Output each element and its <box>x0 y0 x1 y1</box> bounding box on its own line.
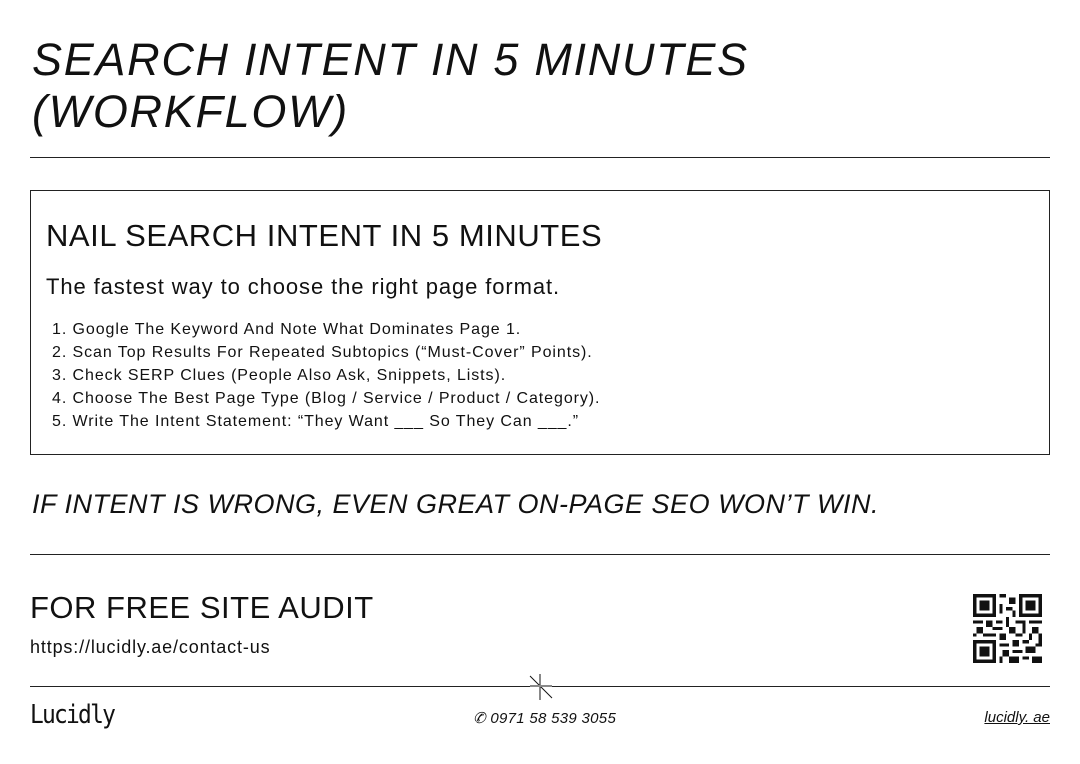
icon: QR code <box>973 594 1042 663</box>
box heading: NAIL SEARCH INTENT IN 5 MINUTES <box>46 218 602 253</box>
steps list <box>52 321 600 430</box>
title: (WORKFLOW) <box>32 86 349 137</box>
panel: workflow box <box>30 190 1050 455</box>
steps list: 5. Write The Intent Statement: “They Want ___ So They Can ___.” <box>52 413 579 430</box>
steps list: 3. Check SERP Clues (People Also Ask, Snippets, Lists). <box>52 367 506 384</box>
phone: ✆ 0971 58 539 3055 <box>473 710 616 727</box>
callout quote: IF INTENT IS WRONG, EVEN GREAT ON-PAGE SEO WON’T WIN. <box>32 489 879 519</box>
logo: Lucidly <box>30 700 114 730</box>
CTA heading: FOR FREE SITE AUDIT <box>30 590 374 625</box>
CTA url: https://lucidly.ae/contact-us <box>30 637 270 657</box>
subtitle: The fastest way to choose the right page format. <box>46 274 560 299</box>
steps list: 4. Choose The Best Page Type (Blog / Service / Product / Category). <box>52 390 600 407</box>
title <box>32 34 749 137</box>
icon: cross mark <box>530 674 552 700</box>
website: lucidly. ae <box>984 709 1050 726</box>
steps list: 2. Scan Top Results For Repeated Subtopics (“Must-Cover” Points). <box>52 344 593 361</box>
title: SEARCH INTENT IN 5 MINUTES <box>32 34 749 85</box>
steps list: 1. Google The Keyword And Note What Dominates Page 1. <box>52 321 521 338</box>
